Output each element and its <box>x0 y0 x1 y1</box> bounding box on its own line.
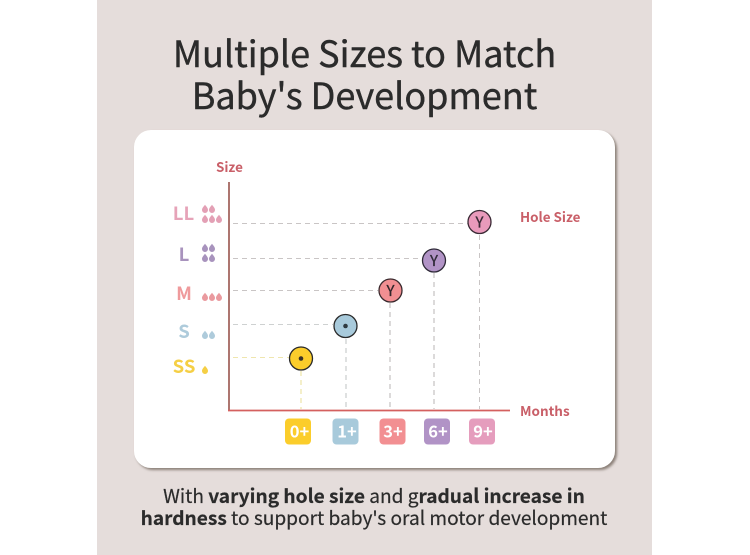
month tag 0+: 0+ <box>290 418 309 442</box>
marker SS 0+ <box>290 347 312 370</box>
size label L: L <box>179 241 189 267</box>
hole size label: Hole Size <box>520 206 581 226</box>
caption: hardness to support baby's oral motor development <box>141 503 607 531</box>
month tag 3+ <box>380 418 406 444</box>
title <box>173 26 556 120</box>
size label S: S <box>178 318 190 344</box>
caption: With varying hole size and gradual increase in <box>163 481 585 509</box>
card shadow <box>136 132 617 470</box>
month tag 1+: 1+ <box>337 418 357 442</box>
marker S 1+ <box>334 314 357 338</box>
guide lines <box>233 224 480 409</box>
title: Multiple Sizes to Match <box>173 26 556 78</box>
month tag 3+: 3+ <box>383 418 403 442</box>
marker LL 9+ <box>468 210 491 234</box>
panel: chart card <box>134 130 615 468</box>
size label LL: LL <box>173 200 194 226</box>
chart: size by months <box>173 156 581 444</box>
axes <box>228 182 230 410</box>
size label L <box>179 241 215 267</box>
size label S <box>178 318 215 344</box>
size label SS <box>173 353 208 379</box>
marker M 3+: Y <box>386 280 395 301</box>
marker L 6+ <box>422 249 446 272</box>
size label M: M <box>176 280 192 306</box>
month tag 9+: 9+ <box>473 418 493 442</box>
size label LL <box>173 200 222 226</box>
title: Baby's Development <box>192 68 538 120</box>
size label M <box>176 280 222 306</box>
x axis title: Months <box>520 400 570 420</box>
month tag 1+ <box>332 418 358 444</box>
background panel <box>97 0 652 555</box>
marker L 6+: Y <box>429 250 438 271</box>
marker LL 9+: Y <box>475 212 484 232</box>
month tag 6+: 6+ <box>428 418 448 442</box>
caption <box>141 481 607 531</box>
marker M 3+ <box>379 279 402 302</box>
month tag 9+ <box>469 418 495 444</box>
month tag 0+ <box>285 418 311 444</box>
size label SS: SS <box>173 353 195 379</box>
month tag 6+ <box>424 418 450 444</box>
y axis title: Size <box>216 156 243 176</box>
